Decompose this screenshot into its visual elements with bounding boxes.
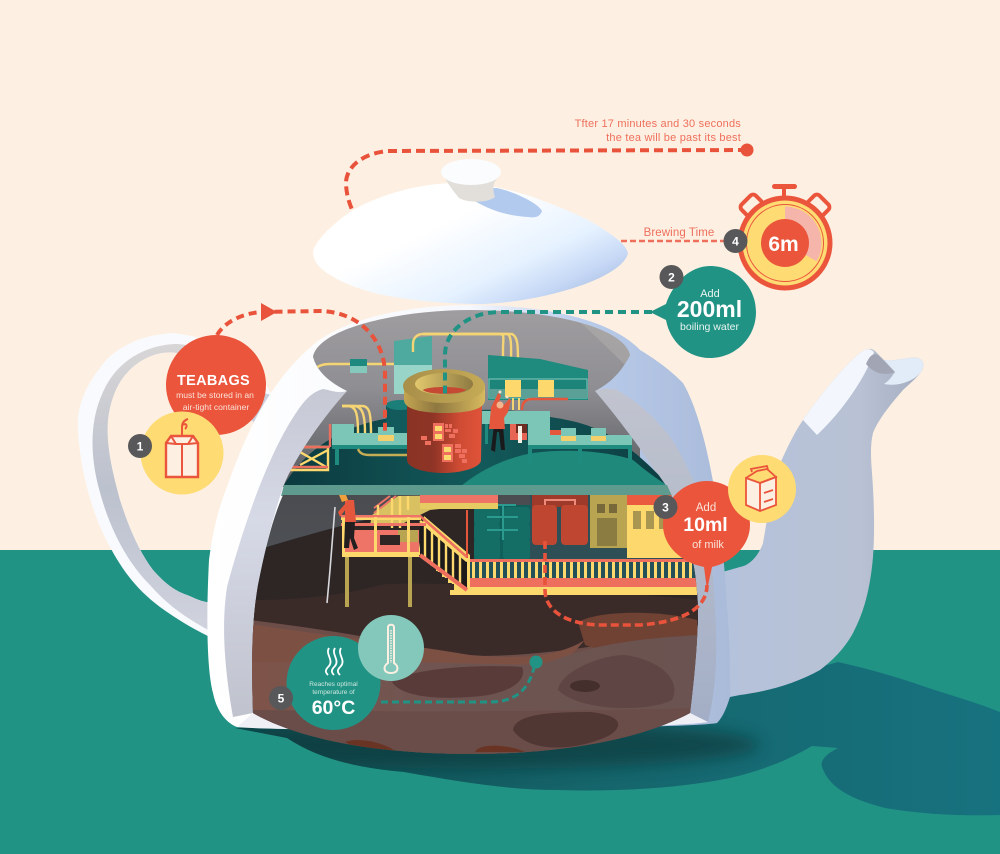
- lid knob: [444, 176, 500, 202]
- callout 3: add milk: 10ml: [683, 514, 728, 536]
- note: past its best: the tea will be past its best: [606, 132, 741, 144]
- badge 5: 5: [278, 692, 285, 706]
- brewing time label with dashed line: Brewing Time: [644, 227, 714, 239]
- yellow building: [627, 495, 682, 558]
- left conveyor: [332, 406, 410, 465]
- badge 3: 3: [662, 500, 669, 514]
- icon: stopwatch brewing timer: [738, 184, 832, 290]
- callout 1: teabags: air-tight container: [183, 402, 249, 412]
- callout 5: optimal temperature: Reaches optimal: [309, 681, 358, 688]
- callout 3: add milk: of milk: [692, 539, 724, 551]
- badge 3: [654, 495, 678, 519]
- green hill: [460, 451, 670, 487]
- callout 2: add boiling water: [650, 266, 756, 358]
- teapot shadow on table: [220, 662, 1000, 815]
- platform rails: [341, 515, 421, 518]
- dark green small tank: [386, 400, 407, 433]
- tank windows: [421, 423, 467, 463]
- stairs and platforms: [341, 495, 698, 607]
- teal dashed line from water callout into tank: [445, 312, 652, 394]
- table surface: [0, 550, 1000, 854]
- callout 3: add milk: [663, 481, 750, 590]
- overhead pipes: [313, 334, 518, 372]
- upper platform: [370, 496, 440, 523]
- badge 5: [269, 686, 293, 710]
- brewing time label with dashed line: [621, 227, 725, 241]
- red dashed line from tanks to milk callout: [545, 541, 707, 625]
- callout 1: teabags: [166, 335, 266, 435]
- teapot handle: [78, 333, 275, 638]
- red tanks: [532, 495, 588, 545]
- olive building: [590, 495, 627, 548]
- liquid surface: [250, 584, 700, 760]
- callout 2: add boiling water: 200ml: [677, 296, 742, 322]
- right cut face of shell: [595, 389, 716, 722]
- note: past its best: [575, 118, 741, 144]
- icon: thermometer in light circle: [358, 615, 424, 681]
- scaffold at left: [290, 424, 330, 470]
- left cut face of shell: [224, 389, 347, 717]
- central tank: [403, 369, 485, 473]
- icon: stopwatch brewing timer: 6m: [768, 233, 799, 256]
- badge 4: [724, 229, 748, 253]
- background wall: [0, 0, 1000, 550]
- badge 2: 2: [668, 270, 675, 284]
- red pipe and machinery: [510, 398, 568, 443]
- badge 2: [660, 265, 684, 289]
- floor slab between levels: [281, 485, 672, 496]
- red dashed line from teabags to conveyor: [217, 303, 385, 433]
- callout 5: optimal temperature: [286, 636, 380, 730]
- dark back wall: [250, 505, 700, 620]
- worker with pole: [327, 495, 358, 603]
- callout 2: add boiling water: boiling water: [680, 321, 739, 333]
- back tanks and walkway wall: [530, 495, 694, 560]
- callout 2: add boiling water: Add: [700, 288, 720, 300]
- callout 5: optimal temperature: 60°C: [312, 697, 355, 719]
- teal dashed line to temperature dot: [381, 656, 542, 702]
- badge 4: 4: [732, 234, 739, 248]
- callout 1: teabags: TEABAGS: [177, 373, 250, 389]
- callout 1: teabags: must be stored in an: [176, 390, 254, 400]
- pipe valve: [350, 359, 367, 373]
- dark floor: [283, 410, 670, 487]
- teapot spout: [712, 349, 923, 697]
- teapot lid: [313, 159, 628, 304]
- badge 1: [128, 434, 152, 458]
- back wall machine left: [394, 336, 432, 394]
- badge 1: 1: [137, 440, 144, 454]
- worker: [489, 390, 511, 452]
- callout 5: optimal temperature: temperature of: [312, 689, 355, 696]
- green tanks: [474, 505, 530, 560]
- red dashed line to lid tag: tea past its best: [346, 144, 754, 212]
- right conveyor: [482, 411, 632, 465]
- callout 3: add milk: Add: [696, 502, 716, 514]
- teapot body shell: [207, 305, 730, 735]
- lower level scene: [250, 495, 700, 760]
- lid knob shadow: [470, 188, 542, 217]
- icon: milk carton in yellow circle: [728, 455, 796, 523]
- upper factory floor scene: [280, 305, 670, 490]
- back machine right: [488, 355, 588, 400]
- icon: teabag in yellow circle: [140, 412, 224, 494]
- note: past its best: Tfter 17 minutes and 30 seconds: [575, 118, 741, 130]
